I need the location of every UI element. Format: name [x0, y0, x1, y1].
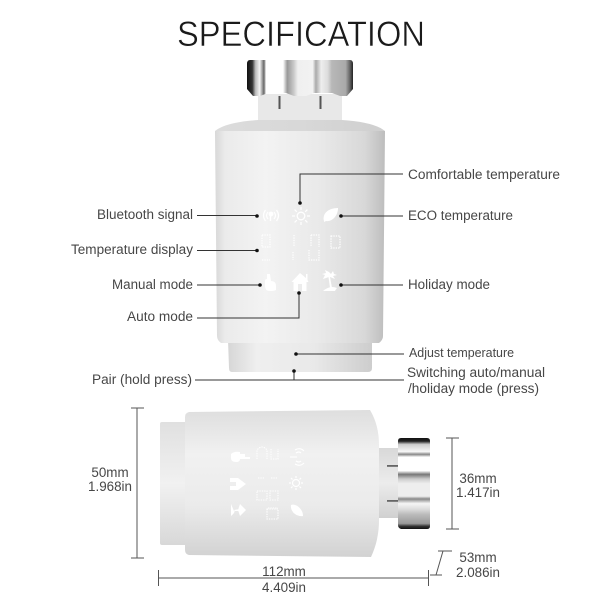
icon: leaf: [324, 208, 338, 222]
dimension: length 112mm: 112mm: [262, 564, 306, 579]
left labels: Pair (hold press): [92, 372, 192, 387]
left labels: [71, 207, 193, 387]
left labels: Temperature display: [71, 242, 193, 257]
dimension: depth 53mm: 2.086in: [456, 565, 500, 580]
left labels: Manual mode: [112, 277, 193, 292]
icon: temperature digits: [262, 235, 340, 260]
display icons top: [262, 207, 340, 291]
title: SPECIFICATION: [177, 15, 425, 54]
main body: [215, 131, 385, 343]
top thermostat device: [215, 60, 385, 372]
dimension: height 50mm: [88, 408, 144, 558]
leader lines and dots: [195, 174, 404, 380]
chrome knob: [398, 438, 430, 529]
right labels: ECO temperature: [408, 208, 513, 223]
right labels: Adjust temperature: [409, 346, 514, 360]
left cap: [160, 422, 186, 545]
side view thermostat device: [160, 410, 430, 557]
dimension: height 50mm: 1.968in: [88, 479, 132, 494]
lower ring: [228, 340, 372, 372]
chrome knob: [247, 60, 353, 96]
display icons side: [230, 447, 304, 519]
icon: palm side: [231, 504, 246, 516]
icon: digits side: [257, 447, 278, 519]
dimension: knob 36mm: 1.417in: [456, 485, 500, 500]
left labels: Auto mode: [127, 309, 193, 324]
icon: hand: [265, 274, 276, 291]
main body: [185, 410, 379, 557]
dimension: height 50mm: 50mm: [91, 465, 129, 480]
dimension: depth 53mm: 53mm: [459, 550, 497, 565]
dimension: knob 36mm: 36mm: [459, 471, 497, 486]
neck: [378, 448, 402, 518]
neck slots: [278, 96, 322, 109]
dimension: knob 36mm: [446, 438, 500, 529]
right labels: Comfortable temperature: [408, 167, 560, 182]
neck slots: [387, 465, 399, 502]
dimension: depth 53mm: [430, 550, 500, 580]
right labels: Holiday mode: [408, 277, 490, 292]
dimension: length 112mm: [158, 564, 428, 595]
shoulder: [215, 120, 385, 134]
icon: home: [292, 273, 308, 291]
icon: sun side: [289, 476, 303, 490]
icon: leaf side: [291, 505, 303, 516]
neck: [258, 94, 342, 122]
icon: hand side: [231, 452, 250, 462]
icon: bluetooth side: [290, 449, 304, 465]
icon: palm: [322, 270, 337, 291]
left labels: Bluetooth signal: [97, 207, 193, 222]
icon: home side: [230, 478, 246, 490]
icon: sun: [292, 207, 310, 225]
icon: bluetooth signal: [264, 210, 278, 221]
right labels: /holiday mode (press): [408, 381, 539, 396]
right labels: [407, 167, 560, 396]
dimension: length 112mm: 4.409in: [262, 580, 306, 595]
right labels: Switching auto/manual: [407, 365, 545, 380]
